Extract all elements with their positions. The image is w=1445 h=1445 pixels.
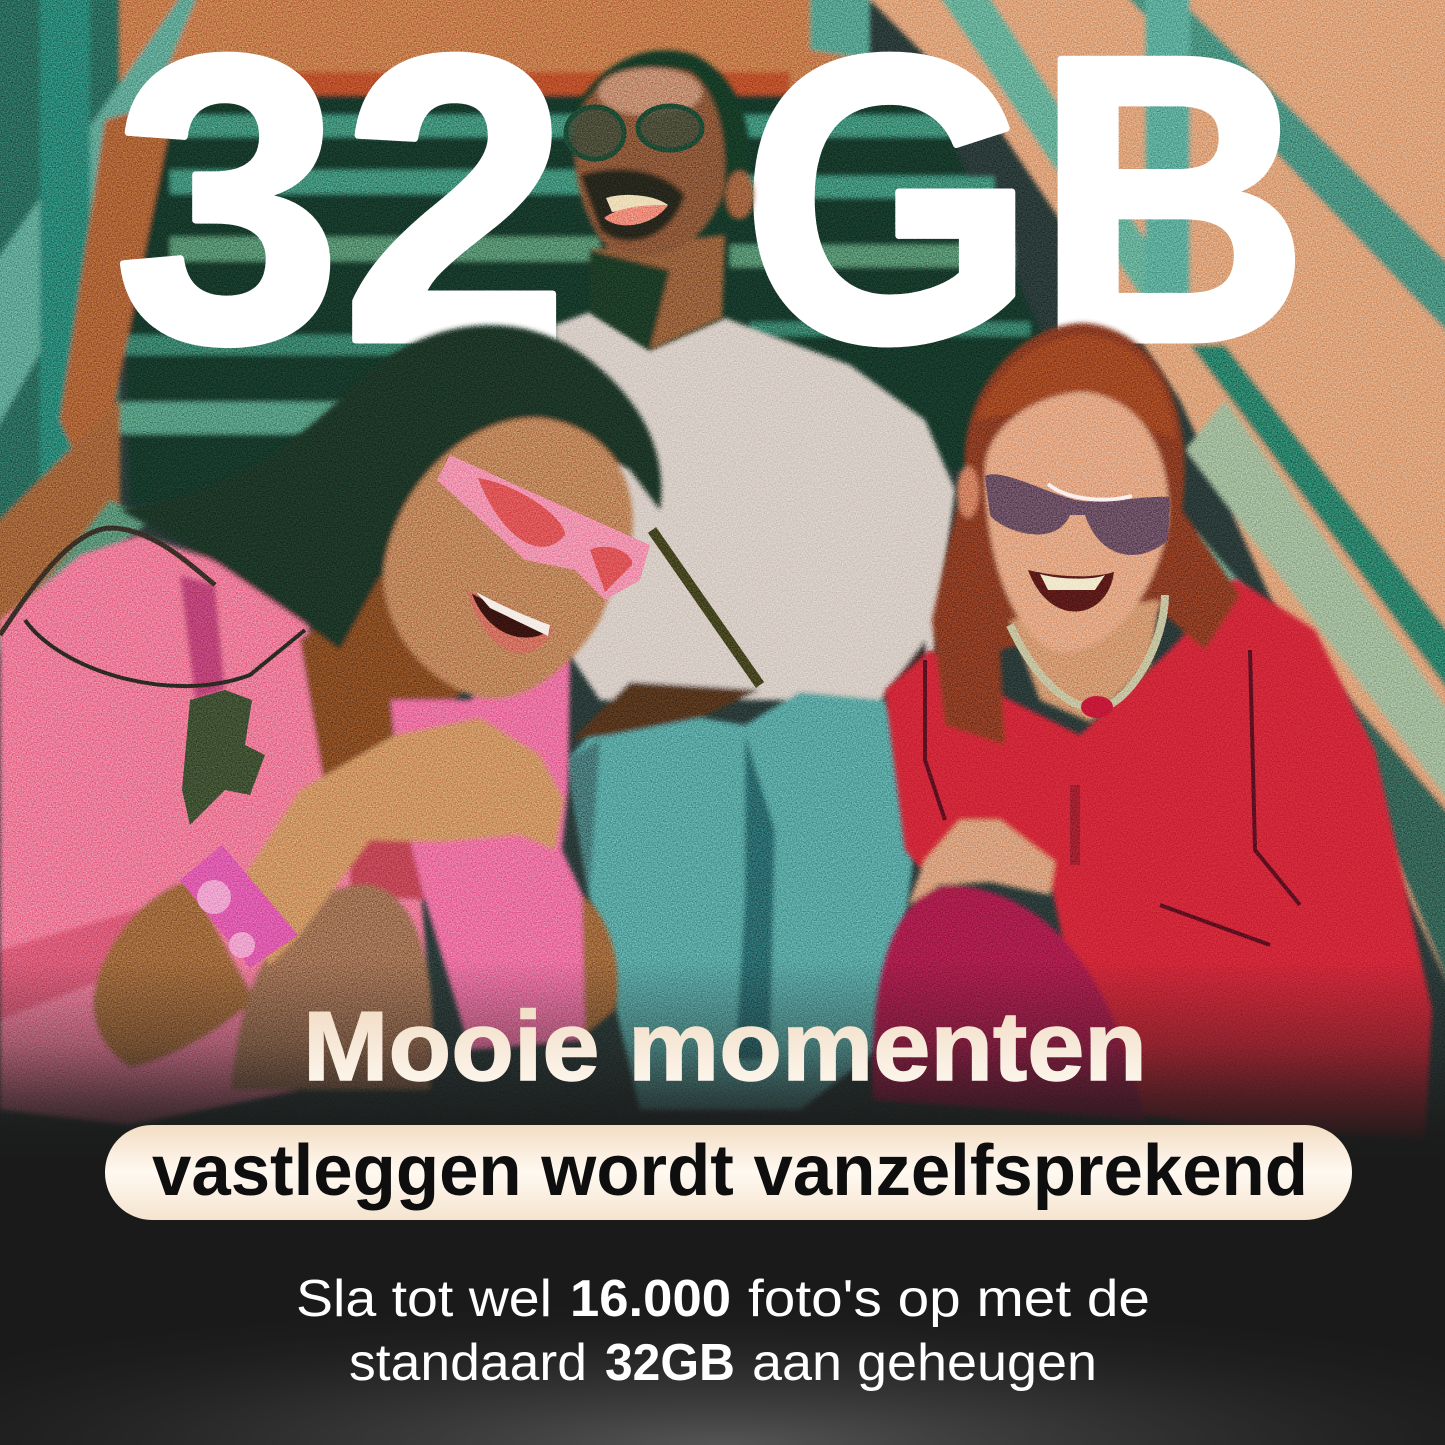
line 1	[296, 1270, 1150, 1328]
dark hair	[120, 325, 661, 650]
pill text: vastleggen wordt vanzelfsprekend	[152, 1131, 1308, 1211]
bag strap outline	[0, 528, 215, 635]
headline: 32 GB	[114, 0, 1309, 427]
tongue	[604, 205, 668, 225]
left railing block	[0, 0, 120, 530]
highlighted subheading pill	[105, 1125, 1352, 1220]
hair highlights	[975, 335, 1176, 440]
brick wall top	[0, 0, 860, 620]
pink scarf sleeve	[391, 650, 585, 1050]
necklace	[1010, 595, 1165, 708]
photo: man head overlapping headline	[566, 50, 754, 350]
under arm detail	[880, 640, 935, 700]
laughing mouth	[467, 590, 553, 654]
dark pink trousers	[872, 885, 1145, 1120]
round glasses	[566, 106, 702, 159]
hair back	[932, 323, 1240, 745]
hand	[908, 820, 1055, 905]
pink jacket	[0, 535, 430, 1125]
line 2: aan geheugen	[752, 1334, 1097, 1392]
photo: woman on the right in red hoodie	[872, 323, 1432, 1140]
photo: man in white shirt	[555, 312, 955, 1110]
man shirt	[555, 312, 955, 700]
line 1: 16.000	[570, 1270, 731, 1328]
face	[384, 418, 633, 699]
line 2: 32GB	[605, 1334, 735, 1392]
ear	[726, 171, 754, 219]
bottom dark gradient	[0, 960, 1445, 1170]
glasses bridge highlight	[1048, 484, 1132, 500]
face	[985, 392, 1168, 652]
photo grain	[0, 0, 1445, 1130]
man jeans	[566, 692, 925, 1110]
line 1: Sla tot wel	[296, 1270, 552, 1328]
purple glasses	[985, 474, 1170, 555]
forehead	[598, 68, 702, 116]
line 2	[349, 1334, 1097, 1392]
necklace pendant	[1081, 696, 1113, 718]
lower arm	[93, 880, 255, 1068]
polka dot wristband	[180, 845, 298, 968]
neck	[300, 570, 465, 790]
sunglasses lens right	[590, 547, 632, 592]
green bag clip	[182, 690, 265, 825]
body copy	[296, 1270, 1150, 1392]
hoodie seams	[925, 650, 1300, 945]
neck	[590, 235, 725, 350]
knee behind	[231, 885, 432, 1090]
man strap	[652, 530, 760, 685]
ear	[957, 466, 979, 518]
right railings	[935, 0, 1210, 340]
dark footer panel	[0, 1165, 1445, 1445]
beard	[580, 169, 685, 241]
forearm and hand	[225, 718, 564, 965]
pill background	[105, 1125, 1352, 1220]
red pink under hand	[350, 830, 425, 900]
sunglasses lens left	[478, 478, 565, 547]
photo: woman on the left in pink jacket	[0, 325, 661, 1125]
teeth	[606, 195, 668, 212]
neck and chest	[1010, 600, 1160, 722]
stair highlights	[110, 115, 1030, 434]
footer glow	[0, 1225, 1445, 1445]
knee right	[582, 895, 618, 1035]
heading: Mooie momenten: Mooie momenten	[303, 991, 1147, 1101]
hair	[575, 50, 752, 222]
pink sunglasses	[437, 455, 650, 600]
red hoodie	[885, 578, 1432, 1140]
smile	[1028, 570, 1114, 612]
pink strap	[180, 575, 225, 700]
man arm	[572, 682, 760, 740]
line 2: standaard	[349, 1334, 587, 1392]
bag cord	[25, 620, 305, 686]
orange-red shadow under wall	[150, 72, 790, 98]
face	[574, 68, 725, 257]
stair case	[120, 95, 1045, 505]
jacket fold shading	[0, 900, 180, 1020]
line 1: foto's op met de	[748, 1270, 1150, 1328]
jeans shadow	[735, 735, 775, 1060]
